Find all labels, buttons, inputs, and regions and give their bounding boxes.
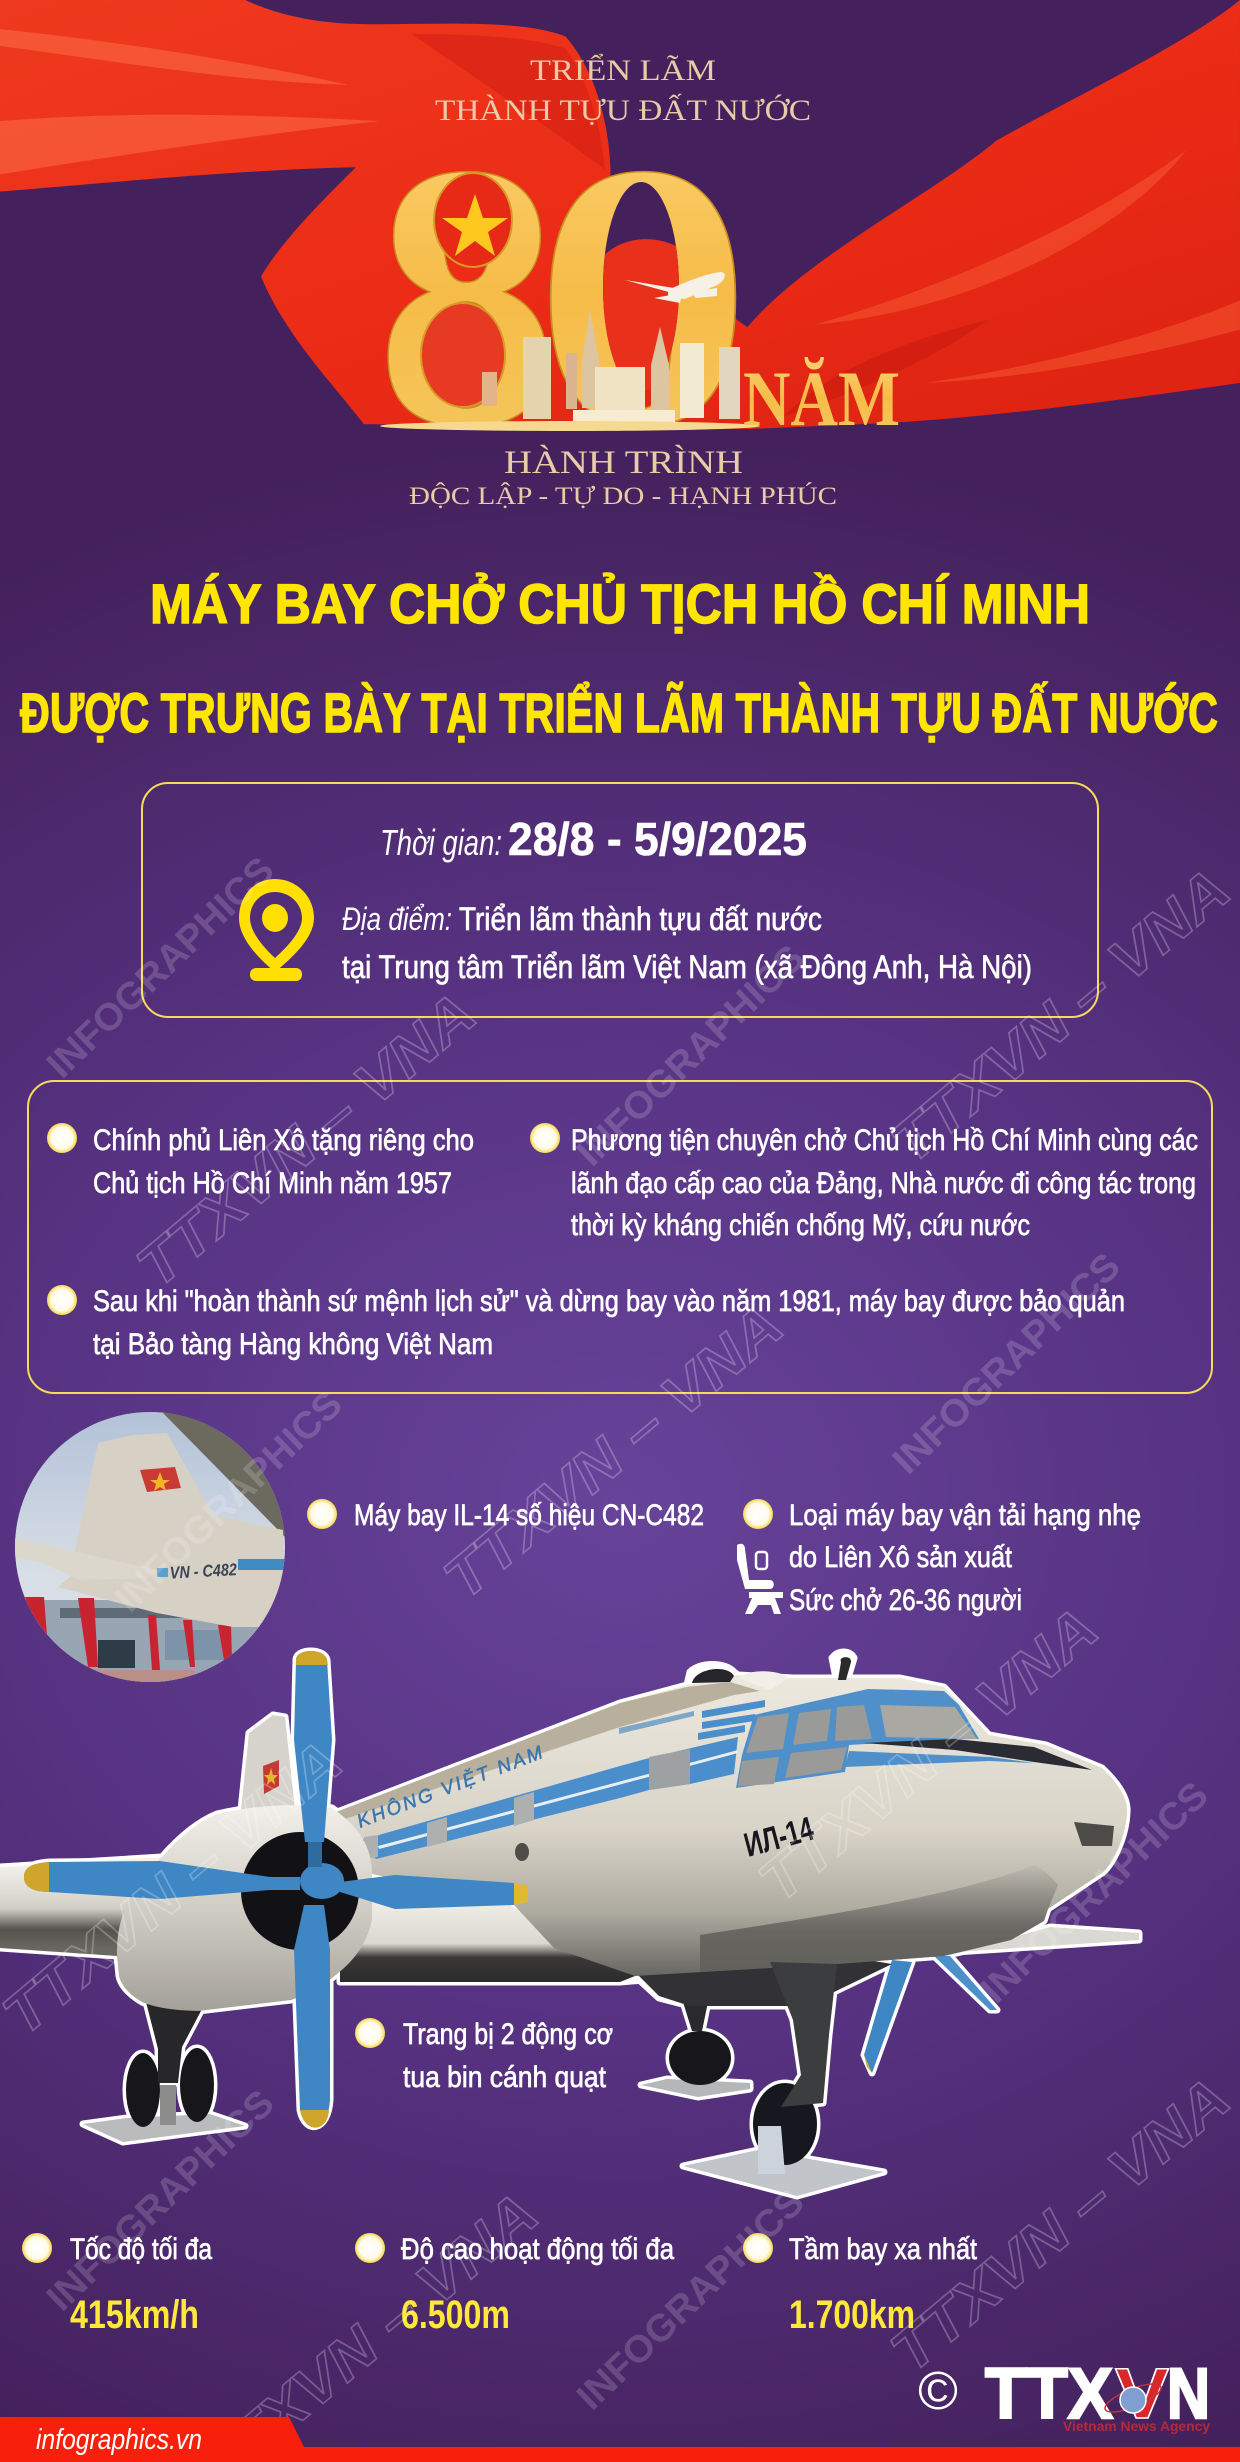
watermarks: TTXVN – VNA bbox=[432, 1292, 795, 1612]
icon: location pin bbox=[239, 879, 314, 981]
logo: TTXVN: V bbox=[1115, 2355, 1169, 2434]
text: place: Triển lãm thành tựu đất nước bbox=[459, 901, 822, 937]
nose stripe bbox=[845, 1751, 1034, 1767]
panel: history facts bbox=[28, 1081, 1212, 1393]
fuselage bbox=[332, 1657, 1127, 1976]
upper counter of 8 bbox=[434, 173, 512, 267]
dorsal fittings bbox=[692, 1669, 734, 1683]
emblem: gold 80 years bbox=[380, 170, 898, 431]
blue cabin stripe bbox=[358, 1737, 738, 1859]
nose radar window bbox=[1074, 1822, 1114, 1846]
logo: TTXVN: © bbox=[918, 2361, 958, 2421]
underbelly and near wing bbox=[340, 1900, 892, 2006]
airplane IL-14 bbox=[0, 1651, 1139, 2196]
icon: small airplane bbox=[625, 272, 725, 303]
centre landing gear bbox=[641, 2002, 750, 2097]
watermarks: TTXVN – VNA bbox=[0, 1728, 354, 2048]
header: journey subtitle: HÀNH TRÌNH bbox=[504, 444, 743, 481]
cockpit windows bbox=[738, 1705, 977, 1786]
spec: aircraft type bbox=[743, 1499, 1141, 1617]
text: time: Thời gian: bbox=[380, 822, 502, 863]
fact 1: Chính phủ Liên Xô tặng riêng cho bbox=[93, 1124, 474, 1157]
far wing and propeller bbox=[864, 1927, 1139, 2073]
stat: top speed bbox=[22, 2233, 212, 2337]
header: journey subtitle: ĐỘC LẬP - TỰ DO - HẠNH PHÚC bbox=[409, 482, 837, 510]
propeller bbox=[24, 1651, 528, 2128]
text: time: 28/8 - 5/9/2025 bbox=[508, 813, 807, 865]
lower counter of 8 bbox=[421, 303, 505, 407]
emblem: gold 80 years: 0 bbox=[534, 86, 752, 505]
photo: aircraft tail: VN - C482 bbox=[169, 1560, 238, 1583]
stat: max range bbox=[743, 2233, 978, 2337]
header ribbon: red silk bbox=[0, 0, 1240, 429]
header: exhibition title: THÀNH TỰU ĐẤT NƯỚC bbox=[435, 93, 811, 127]
spec: aircraft type: Sức chở 26-36 người bbox=[789, 1584, 1022, 1617]
spec: engines: tua bin cánh quạt bbox=[403, 2061, 607, 2094]
watermarks: INFOGRAPHICS bbox=[569, 937, 813, 1174]
title bbox=[20, 572, 1218, 744]
watermarks bbox=[0, 849, 1240, 2462]
left main landing gear bbox=[83, 2002, 245, 2142]
tail fin bbox=[241, 1715, 295, 1810]
text: place bbox=[342, 901, 1032, 985]
stat: max altitude bbox=[355, 2233, 674, 2337]
panel: time and place bbox=[142, 783, 1098, 1017]
stat: top speed: 415km/h bbox=[70, 2293, 199, 2337]
porthole bbox=[515, 1843, 529, 1861]
cockpit frame bbox=[736, 1689, 979, 1788]
watermarks: INFOGRAPHICS bbox=[39, 849, 283, 1086]
spec: aircraft model: Máy bay IL-14 số hiệu CN-C482 bbox=[354, 1499, 704, 1532]
fact 3 bbox=[47, 1285, 1125, 1361]
stat: top speed: Tốc độ tối đa bbox=[70, 2233, 212, 2266]
watermarks: TTXVN – VNA bbox=[125, 980, 488, 1300]
stat: max range: Tầm bay xa nhất bbox=[789, 2233, 978, 2266]
header: exhibition title bbox=[435, 54, 811, 127]
tail flashes bbox=[702, 1700, 765, 1718]
fact 2 bbox=[530, 1123, 1198, 1242]
emblem: gold 80 years: NĂM bbox=[743, 355, 900, 442]
emblem: gold 80 years: 8 bbox=[376, 86, 558, 505]
spec: engines: Trang bị 2 động cơ bbox=[403, 2018, 613, 2051]
left wing bbox=[0, 1857, 165, 1956]
text: place: Địa điểm: bbox=[342, 901, 452, 937]
fact 1 bbox=[47, 1123, 474, 1200]
spec: aircraft type: do Liên Xô sản xuất bbox=[789, 1541, 1013, 1574]
footer bar: infographics.vn bbox=[36, 2424, 202, 2456]
text: time bbox=[380, 813, 807, 865]
engine nacelle bbox=[117, 1805, 372, 2011]
white cut-out outline bbox=[0, 1651, 1139, 2196]
footer bar bbox=[0, 2417, 1240, 2462]
logo: TTXVN: N bbox=[1167, 2355, 1210, 2434]
aircraft markings bbox=[354, 1741, 818, 1865]
text: place: tại Trung tâm Triển lãm Việt Nam (xã Đông Anh, Hà Nội) bbox=[342, 949, 1032, 985]
counter of 0 bbox=[603, 182, 679, 392]
header: exhibition title: TRIỂN LÃM bbox=[530, 54, 716, 87]
watermarks: INFOGRAPHICS bbox=[107, 1383, 351, 1620]
nose landing gear bbox=[683, 1962, 884, 2196]
photo: aircraft tail bbox=[14, 1412, 292, 1685]
stat: max altitude: Độ cao hoạt động tối đa bbox=[401, 2233, 674, 2266]
roof fairing bbox=[336, 1682, 760, 1822]
fact 3: tại Bảo tàng Hàng không Việt Nam bbox=[93, 1328, 493, 1361]
icon: star bbox=[442, 194, 508, 256]
watermarks: TTXVN – VNA bbox=[747, 1595, 1110, 1915]
stat: max altitude: 6.500m bbox=[401, 2293, 510, 2337]
watermarks: TTXVN – VNA bbox=[879, 2065, 1240, 2385]
header: journey subtitle bbox=[409, 444, 837, 510]
logo: TTXVN: Vietnam News Agency bbox=[1063, 2419, 1210, 2434]
watermarks: INFOGRAPHICS bbox=[39, 2082, 283, 2319]
watermarks: INFOGRAPHICS bbox=[569, 2181, 813, 2418]
aircraft markings: KHÔNG VIỆT NAM bbox=[354, 1741, 546, 1833]
icon: seat bbox=[737, 1544, 783, 1614]
watermarks: TTXVN – VNA bbox=[879, 856, 1240, 1176]
title: MÁY BAY CHỞ CHỦ TỊCH HỒ CHÍ MINH bbox=[150, 572, 1090, 635]
aircraft markings: ИЛ-14 bbox=[740, 1810, 818, 1865]
fact 1: Chủ tịch Hồ Chí Minh năm 1957 bbox=[93, 1167, 452, 1200]
spec: engines bbox=[355, 2018, 613, 2094]
spec: aircraft type: Loại máy bay vận tải hạng nhẹ bbox=[789, 1499, 1141, 1532]
logo: TTXVN bbox=[918, 2355, 1210, 2434]
stat: max range: 1.700km bbox=[789, 2293, 915, 2337]
watermarks: INFOGRAPHICS bbox=[973, 1774, 1217, 2011]
watermarks: INFOGRAPHICS bbox=[885, 1245, 1129, 1482]
icon: globe bbox=[1102, 2378, 1164, 2418]
logo: TTXVN: TTX bbox=[985, 2355, 1113, 2434]
city skyline bbox=[380, 310, 760, 431]
fact 2: thời kỳ kháng chiến chống Mỹ, cứu nước bbox=[571, 1209, 1030, 1242]
